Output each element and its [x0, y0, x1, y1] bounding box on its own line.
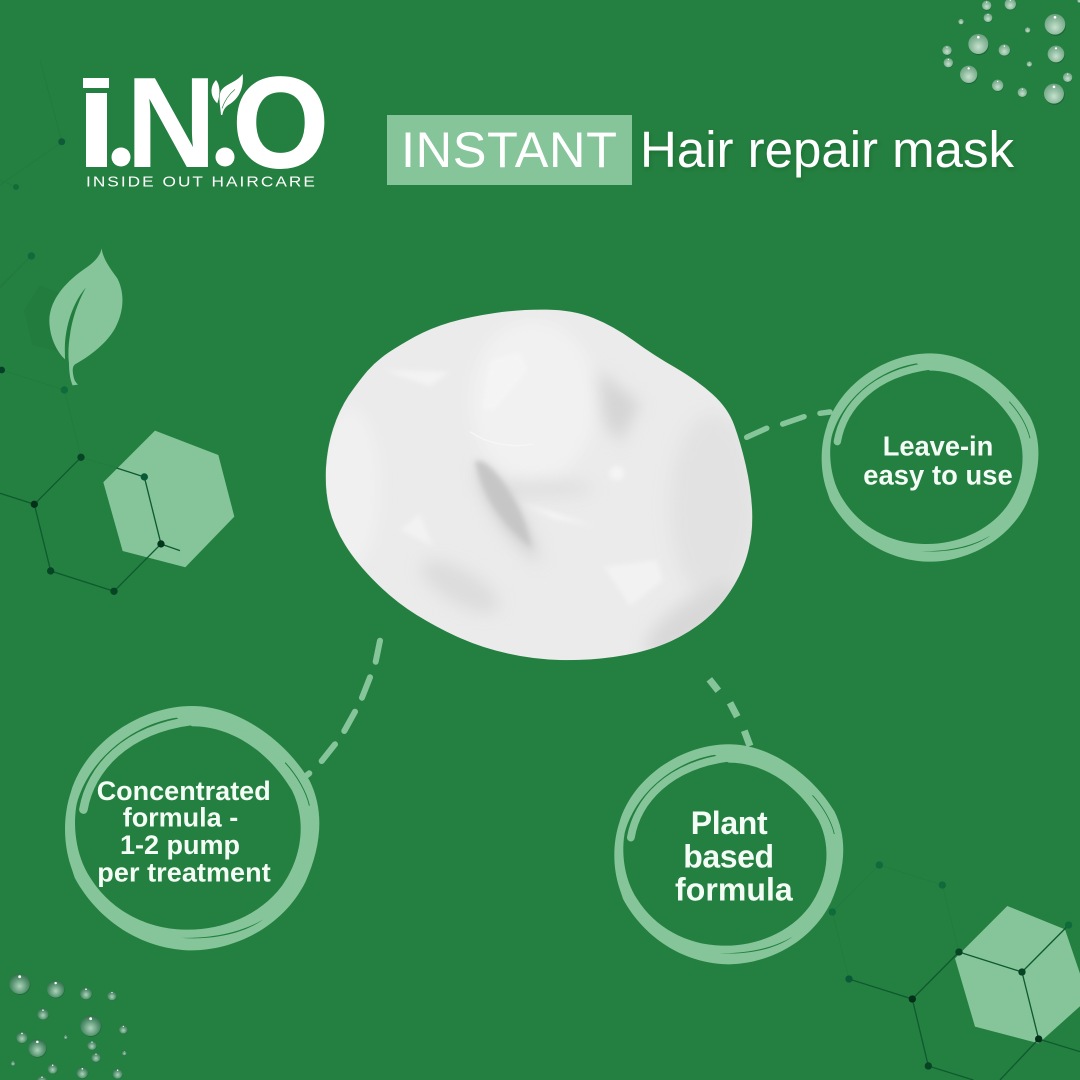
faint hexagon behind leaf [24, 285, 78, 352]
molecule network and hexagon: bottom right [829, 861, 1080, 1080]
label: concentrated formula: formula - [123, 803, 238, 833]
label: leave-in [863, 431, 1013, 490]
label: concentrated formula: per treatment [97, 858, 271, 888]
ring: plant based [614, 744, 843, 964]
label: concentrated formula: Concentrated [97, 776, 271, 806]
label: plant based formula: based [683, 838, 774, 874]
label: leave-in: easy to use [863, 459, 1013, 490]
molecule network: top left [0, 60, 65, 288]
ring: concentrated formula [65, 706, 319, 950]
hexagon: bottom right [955, 906, 1080, 1043]
logo: I.N.O: O [232, 51, 329, 195]
molecule network and hexagon: left [0, 252, 234, 595]
label: plant based formula: Plant [691, 805, 768, 841]
dashed connector: leave-in [747, 412, 830, 437]
hexagon: left [103, 431, 234, 567]
title highlight box and word: INSTANT [401, 121, 617, 178]
water droplets: top right [942, 0, 1080, 105]
label: concentrated formula: 1-2 pump [120, 830, 240, 860]
label: plant based formula: formula [675, 872, 793, 908]
label: leave-in: Leave-in [883, 431, 993, 462]
logo: I.N.O: N [126, 50, 216, 194]
logo: I.N.O: INSIDE OUT HAIRCARE [86, 174, 315, 190]
logo: I.N.O [83, 50, 329, 195]
label: concentrated formula [97, 776, 271, 888]
cream blob [320, 300, 760, 670]
dashed connector: plant based [709, 679, 750, 746]
icon: leaf [49, 248, 122, 385]
dashed connector: concentrated formula [305, 641, 380, 777]
water droplets: bottom left [9, 973, 128, 1080]
label: plant based formula [675, 805, 793, 908]
title: Hair repair mask [640, 121, 1014, 178]
logo leaves [212, 74, 243, 115]
ring: leave-in [822, 353, 1038, 562]
